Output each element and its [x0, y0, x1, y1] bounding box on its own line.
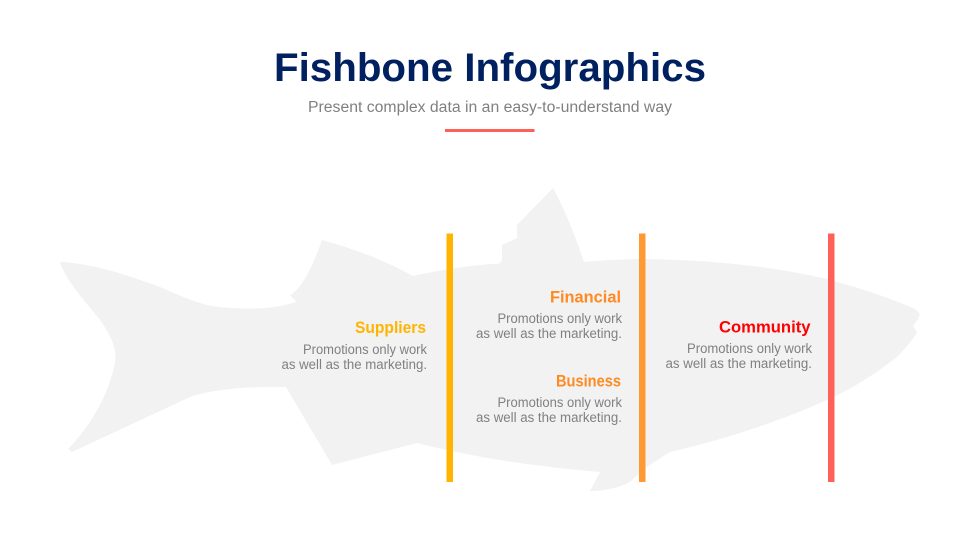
description: business: as well as the marketing.: [476, 410, 622, 425]
description: financial: as well as the marketing.: [476, 326, 622, 341]
block: community: [666, 318, 812, 371]
description: business: [476, 395, 622, 425]
title underline: [445, 129, 534, 132]
subtitle: Present complex data in an easy-to-understand way: [308, 99, 672, 116]
block: business: [476, 372, 622, 425]
description: financial: Promotions only work: [498, 311, 622, 326]
description: business: Promotions only work: [498, 395, 622, 410]
vertical bone: coral: [828, 234, 834, 482]
description: suppliers: as well as the marketing.: [282, 357, 427, 372]
description: suppliers: Promotions only work: [303, 342, 427, 357]
description: community: [666, 341, 812, 371]
vertical bone: yellow: [446, 234, 453, 482]
heading: suppliers: Suppliers: [355, 318, 426, 337]
heading: financial: Financial: [550, 288, 621, 306]
title: Fishbone Infographics: [274, 46, 706, 90]
fish silhouette: [60, 188, 920, 491]
block: financial: [476, 288, 622, 341]
heading: community: Community: [719, 318, 811, 336]
description: community: as well as the marketing.: [666, 356, 812, 371]
heading: business: Business: [556, 372, 621, 390]
description: suppliers: [282, 342, 427, 372]
description: community: Promotions only work: [687, 341, 812, 356]
vertical bone: orange: [639, 234, 646, 482]
block: suppliers: [282, 318, 427, 372]
description: financial: [476, 311, 622, 341]
